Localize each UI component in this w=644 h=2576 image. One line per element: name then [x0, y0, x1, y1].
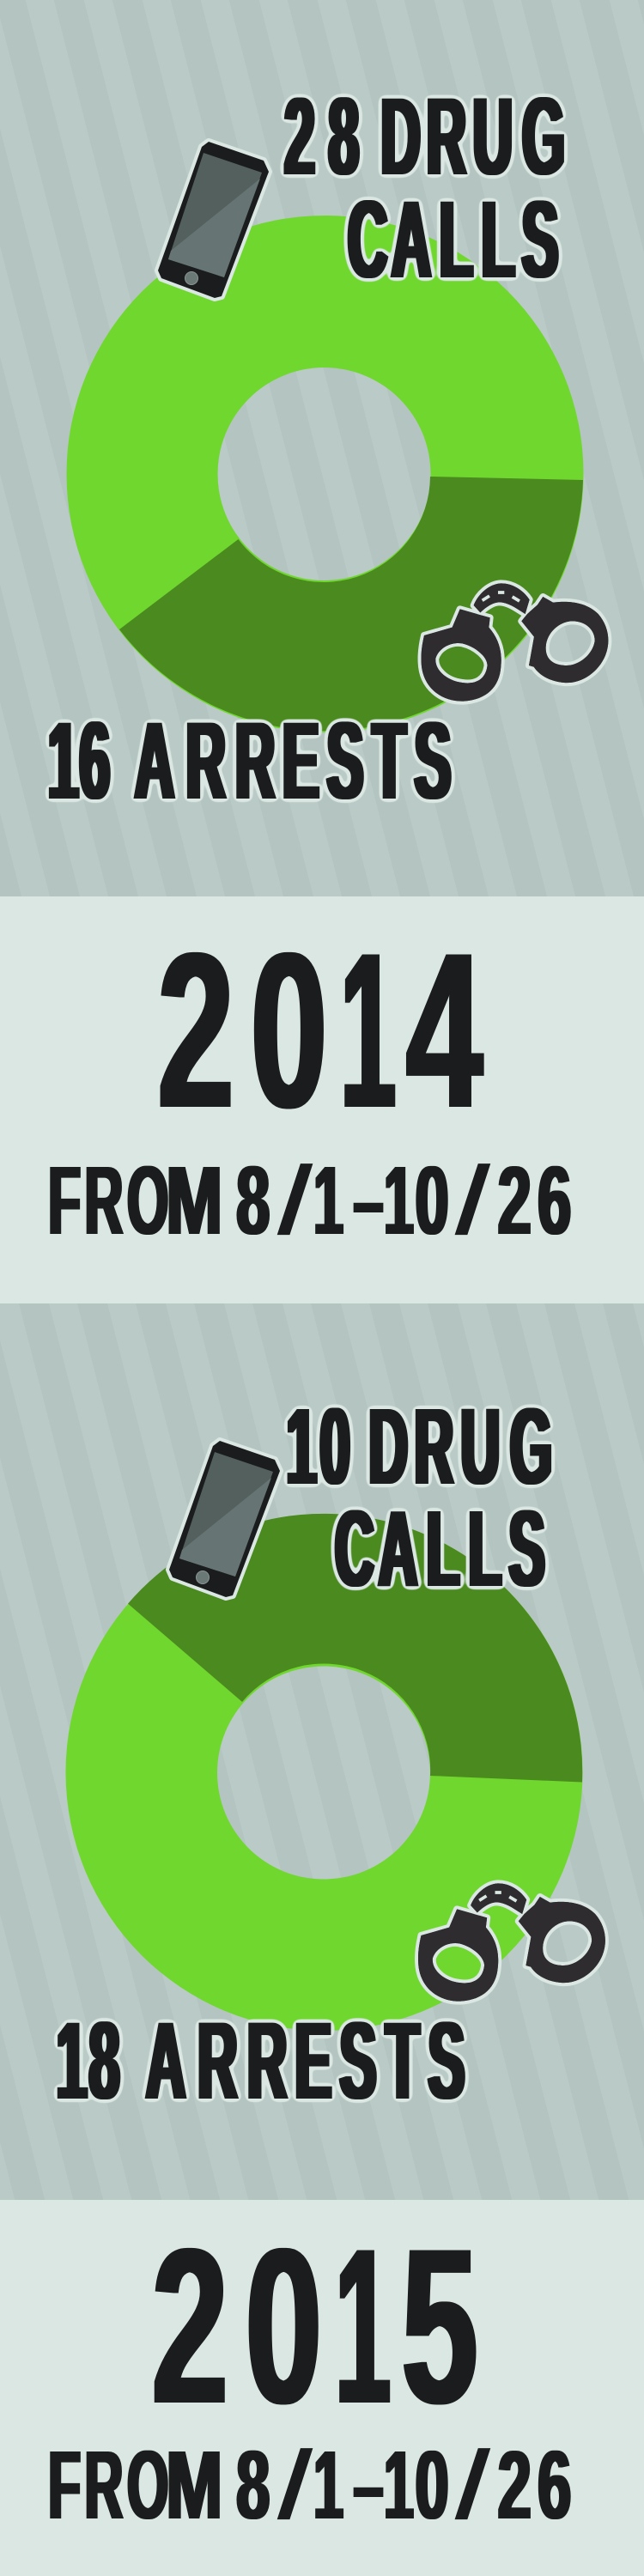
label: 16 arrests: ARRESTS [135, 700, 451, 823]
date range 2014: 0 [416, 1146, 449, 1255]
heading: 2015 [152, 2203, 477, 2450]
date range 2015: / [457, 2432, 489, 2539]
label: 10 drug calls: 10 [287, 1387, 350, 1508]
panel: 2014 caption [0, 896, 644, 1303]
panel background 2014 [0, 896, 644, 1303]
heading: 2014: 4 [406, 908, 483, 1154]
date range 2014: / [457, 1147, 489, 1255]
label: 28 drug calls: CALLS [348, 179, 558, 301]
heading: 2014: 20 [158, 908, 327, 1154]
label: 10 drug calls [287, 1387, 552, 1610]
icon: phone 2015 [169, 1441, 280, 1597]
label: 28 drug calls: DRUG [381, 76, 565, 198]
striped background 2015 [0, 1303, 644, 2200]
heading: 2015: 20 [152, 2203, 322, 2450]
icon: handcuffs 2015 [418, 1883, 605, 2002]
date range 2015: 8 [236, 2431, 270, 2539]
label: 10 drug calls: CALLS [335, 1489, 545, 1610]
date range 2014: / [279, 1147, 312, 1255]
icon: phone 2014 [158, 142, 269, 298]
panel: 2015 caption [0, 2200, 644, 2576]
label: 10 drug calls: DRUG [369, 1387, 552, 1508]
heading: 2015: 1 [335, 2203, 391, 2450]
donut chart 2015 [65, 1514, 582, 2031]
heading: 2014: 1 [340, 908, 396, 1154]
panel background 2015 [0, 2200, 644, 2576]
date range 2015: FRO [48, 2431, 168, 2540]
date range 2015 [48, 2431, 571, 2540]
date range 2015: M [166, 2431, 222, 2539]
donut segment: drug calls 2015 [128, 1514, 582, 1783]
donut segment: arrests 2015 [65, 1514, 582, 2031]
label: 18 arrests: ARRESTS [146, 2000, 465, 2123]
label: 18 arrests: 18 [57, 2000, 119, 2123]
date range 2014: M [166, 1146, 222, 1255]
date range 2014: FRO [48, 1146, 168, 1255]
date range 2015: 1–1 [313, 2431, 414, 2540]
date range 2015: 0 [416, 2431, 449, 2539]
date range 2015: / [279, 2432, 312, 2539]
label: 28 drug calls: 28 [284, 76, 359, 198]
striped background 2014 [0, 0, 644, 896]
panel: 2014 chart [0, 0, 644, 896]
heading: 2015: 5 [401, 2203, 477, 2450]
date range 2014: 8 [236, 1146, 270, 1255]
label: 28 drug calls [284, 76, 565, 301]
panel: 2015 chart [0, 1303, 644, 2200]
heading: 2014 [158, 908, 483, 1154]
donut segment: drug calls 2014 [67, 216, 584, 732]
date range 2014: 1–1 [313, 1146, 414, 1255]
label: 16 arrests: 16 [48, 700, 110, 823]
date range 2014 [48, 1146, 571, 1255]
donut chart 2014 [67, 216, 584, 732]
date range 2014: 26 [498, 1146, 571, 1255]
date range 2015: 26 [498, 2431, 571, 2539]
donut segment: arrests 2014 [119, 477, 583, 731]
icon: handcuffs 2014 [422, 583, 608, 702]
